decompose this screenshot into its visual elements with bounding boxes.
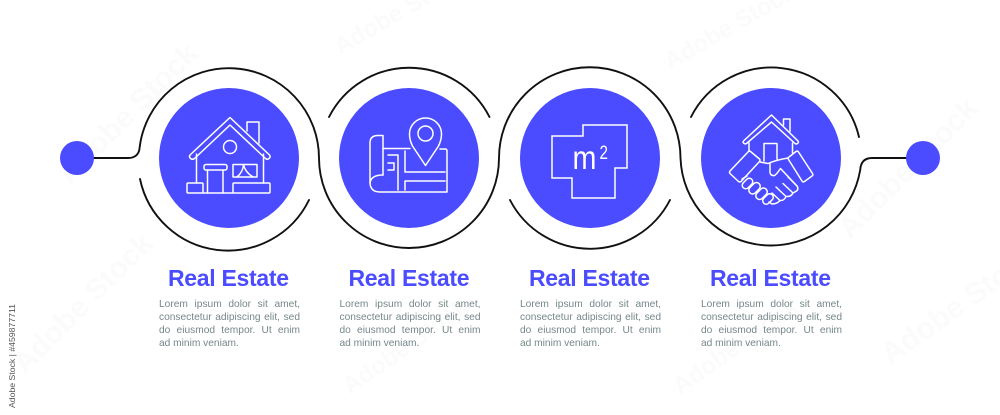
- body text 3: ad minim veniam.: [520, 338, 600, 349]
- text: Adobe Stock: [338, 293, 474, 400]
- left end dot: [60, 141, 94, 175]
- body text 2: ad minim veniam.: [340, 338, 419, 349]
- body text 4: do eiusmod tempor. Ut enim: [701, 325, 842, 336]
- right end dot: [906, 141, 940, 175]
- body text 1: Lorem ipsum dolor sit amet,: [159, 299, 300, 310]
- text: Adobe Stock: [668, 293, 804, 400]
- text: Adobe Stock: [7, 227, 160, 380]
- circle 2 with map and pin icon: [339, 88, 479, 228]
- body text 3: Lorem ipsum dolor sit amet,: [520, 299, 661, 310]
- body text 2: Lorem ipsum dolor sit amet,: [340, 299, 480, 310]
- heading 1: Real Estate: [168, 265, 289, 291]
- heading 2: Real Estate: [348, 265, 469, 291]
- circle 3 with square metre floor plan icon: m: [572, 139, 596, 176]
- column 3 text: [520, 265, 661, 349]
- body text 1: consectetur adipiscing elit, sed: [159, 312, 300, 323]
- body text 4: consectetur adipiscing elit, sed: [701, 312, 842, 323]
- circle 3 with square metre floor plan icon: 2: [600, 141, 608, 163]
- body text 3: [520, 299, 661, 349]
- heading 3: Real Estate: [529, 265, 650, 291]
- text: Adobe Stock: [52, 37, 205, 190]
- body text 2: do eiusmod tempor. Ut enim: [340, 325, 480, 336]
- text: Adobe Stock: [832, 92, 985, 245]
- body text 3: consectetur adipiscing elit, sed: [520, 312, 661, 323]
- body text 1: ad minim veniam.: [159, 338, 239, 349]
- connector arcs: [94, 67, 906, 251]
- body text 4: [701, 299, 842, 349]
- column 4 text: [701, 265, 842, 349]
- body text 4: Lorem ipsum dolor sit amet,: [701, 299, 842, 310]
- column 2 text: [340, 265, 480, 349]
- body text 3: do eiusmod tempor. Ut enim: [520, 325, 661, 336]
- column 1 text: [159, 265, 300, 349]
- body text 2: consectetur adipiscing elit, sed: [340, 312, 480, 323]
- circle 1 with house icon: [159, 88, 299, 228]
- circle 4 with house and handshake icon: [701, 88, 841, 228]
- body text 1: do eiusmod tempor. Ut enim: [159, 325, 300, 336]
- body text 1: [159, 299, 300, 349]
- heading 4: Real Estate: [710, 265, 831, 291]
- circle 3 with square metre floor plan icon: [520, 88, 660, 228]
- side credit text: Adobe Stock | #459877711: [7, 304, 17, 408]
- body text 4: ad minim veniam.: [701, 338, 781, 349]
- body text 2: [340, 299, 480, 349]
